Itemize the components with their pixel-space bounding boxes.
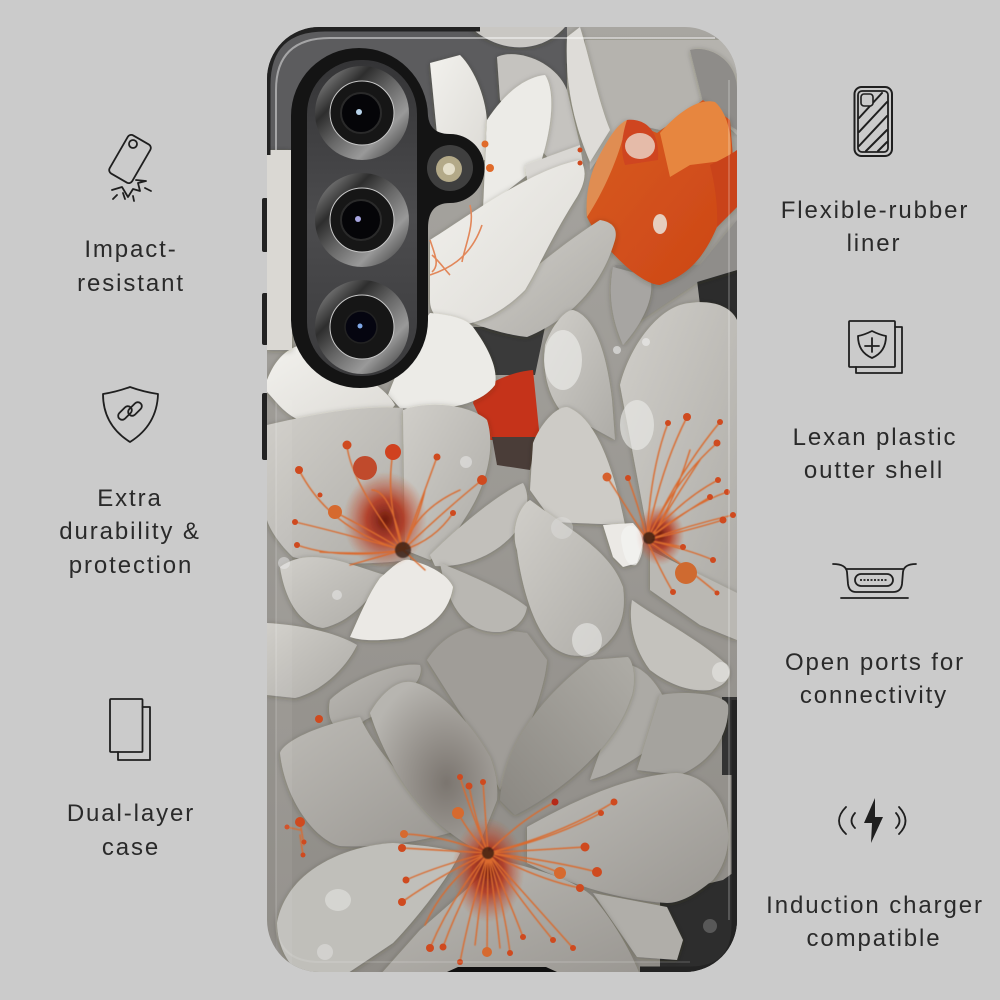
label [59, 485, 201, 579]
icon: shield with link [103, 387, 158, 442]
label: case [102, 834, 160, 861]
left flower red centre [343, 472, 427, 568]
label: Induction charger [766, 892, 984, 919]
label: Dual-layer [67, 800, 195, 827]
flash [427, 145, 473, 191]
right flower petals [515, 302, 737, 690]
label [766, 892, 984, 952]
lens: middle [315, 173, 409, 267]
icon: two layers [110, 699, 150, 760]
feature: lexan shell [793, 321, 957, 484]
orange flower highlights [587, 101, 737, 227]
label: connectivity [800, 682, 948, 709]
label [793, 424, 957, 484]
orange veins on white petal [430, 205, 482, 275]
label [67, 800, 195, 861]
label: outter shell [804, 457, 944, 484]
label: Impact- [84, 236, 178, 263]
phone side buttons [262, 198, 268, 460]
label: compatible [806, 925, 942, 952]
white upper flower [267, 55, 616, 426]
label: Open ports for [785, 649, 965, 676]
label [781, 197, 969, 257]
icon: dropped phone [108, 133, 152, 201]
feature: impact-resistant [77, 133, 185, 297]
label [77, 236, 185, 297]
camera island [291, 48, 485, 388]
feature: open ports [785, 564, 965, 709]
orange flower [587, 100, 737, 285]
icon: USB port [833, 564, 916, 598]
label: Lexan plastic [793, 424, 957, 451]
label: liner [847, 230, 901, 257]
flower hearts [395, 532, 655, 859]
dark stem behind red petal [492, 437, 537, 470]
label: durability & [59, 518, 201, 545]
icon: liner [854, 87, 892, 156]
label: Extra [97, 485, 163, 512]
stamen tips [284, 140, 736, 965]
red background petal [473, 370, 540, 440]
lens: top [315, 66, 409, 160]
lower flower back petals [329, 665, 728, 780]
top-right pale flower [470, 27, 737, 345]
feature: induction charging [766, 798, 984, 952]
icon: wireless bolt [839, 798, 906, 843]
right flower red centre [636, 505, 684, 565]
label: Flexible-rubber [781, 197, 969, 224]
feature: flexible-rubber liner [781, 87, 969, 257]
stamens [287, 417, 733, 962]
feature: extra durability [59, 387, 201, 579]
lower flower petals [277, 657, 728, 975]
label: protection [69, 552, 193, 579]
back petals between flowers [267, 407, 547, 790]
lens: bottom [315, 280, 409, 374]
left centre flower petals [267, 405, 527, 698]
label: resistant [77, 270, 185, 297]
lower flower red centre [452, 818, 524, 922]
feature: dual-layer case [67, 699, 195, 861]
case gloss and rim [268, 29, 735, 972]
water droplets [278, 133, 730, 960]
dark gaps in print [267, 27, 737, 972]
icon: layered shield [849, 321, 902, 373]
phone case with floral print [267, 27, 737, 975]
label [785, 649, 965, 709]
